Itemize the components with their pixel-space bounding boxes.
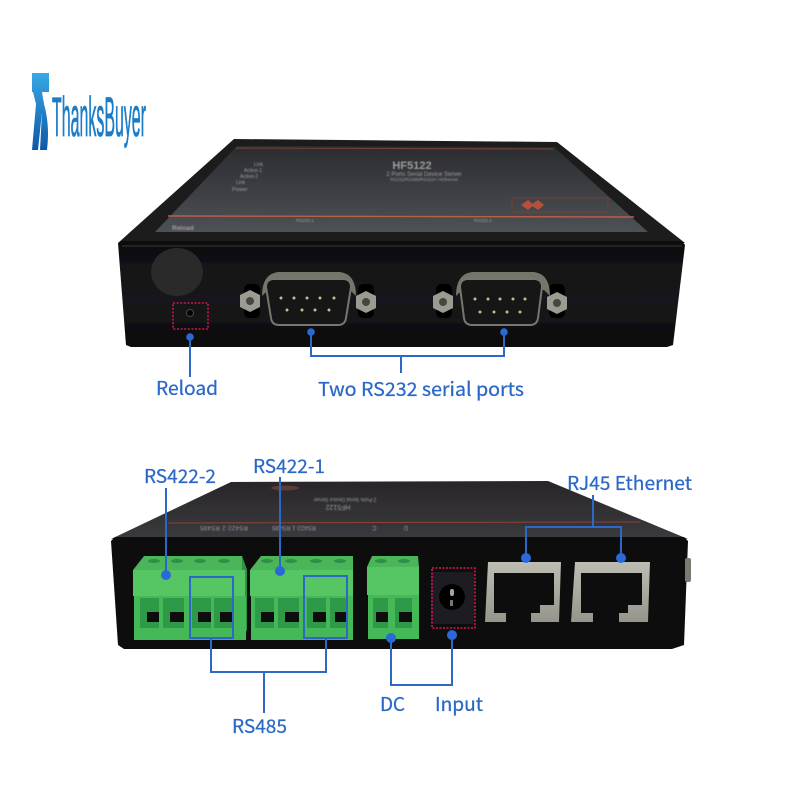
callout: RS485: RS485: [232, 712, 287, 739]
text: ThanksBuyer: [52, 85, 146, 148]
plate printed text: RS422-1 RS485: [271, 524, 316, 530]
plate printed text: Power: [232, 187, 248, 193]
dotted power jack frame: [432, 568, 475, 628]
RJ45 port 1: [485, 562, 561, 622]
dotted reload frame: [173, 303, 208, 329]
plate reflection: [271, 486, 299, 490]
front rim highlight: [122, 245, 682, 247]
plate printed text: HF5122: [325, 503, 350, 510]
callout: Two RS232 serial ports: [307, 328, 524, 402]
plate orange lines: [168, 148, 634, 217]
DB9 connector 1: [240, 272, 376, 325]
callout: DC Input: Input: [435, 690, 483, 717]
callout: RJ45 Ethernet: [521, 469, 692, 563]
device top face: [118, 139, 685, 243]
plate orange line: [168, 522, 640, 523]
plate printed text: [199, 496, 408, 530]
reload hole: [186, 310, 194, 316]
device front face: [111, 537, 688, 649]
callout: Two RS232 serial ports: Two RS232 serial ports: [318, 375, 524, 402]
plate printed text: HF5122: [392, 160, 432, 172]
plate printed text: RS232/RS485/RS422<->Ethernet: [390, 177, 459, 182]
label plate: [155, 146, 648, 232]
RJ45 port 2: [571, 562, 650, 622]
reload cap: [151, 248, 203, 296]
icon: logo mark: [32, 73, 49, 150]
power jack: [431, 572, 474, 624]
plate printed text: 2 Ports Serial Device Server: [313, 496, 376, 502]
callout: DC Input: DC: [380, 690, 405, 717]
plate printed text: DC: [371, 524, 408, 530]
device top face: [111, 481, 688, 539]
side screw: [685, 558, 691, 582]
callout: RS422-1: RS422-1: [253, 452, 325, 479]
plate printed text: 2 Ports Serial Device Server: [386, 172, 462, 178]
callout: RS485: [190, 576, 347, 739]
terminal block DC: [367, 556, 419, 639]
callout: RS422-2: [144, 462, 216, 580]
callout: DC Input: [380, 630, 483, 717]
plate printed text: RS422-2 RS485: [199, 524, 248, 530]
callout: RS422-2: RS422-2: [144, 462, 216, 489]
plate printed text: RS232-1: [296, 218, 314, 223]
plate printed text: Link: [254, 162, 264, 168]
device photo: top view, serial side: [118, 139, 685, 347]
plate printed text: [172, 160, 492, 232]
plate printed text: Link: [236, 180, 246, 186]
DB9 connector 2: [433, 272, 567, 325]
callout: RJ45 Ethernet: RJ45 Ethernet: [567, 469, 692, 496]
callout: Reload: [156, 333, 218, 401]
logo: ThanksBuyer: [32, 73, 146, 150]
callout: Reload: Reload: [156, 374, 218, 401]
callout: RS422-1: [253, 452, 325, 576]
terminal block RS422-1: [250, 556, 353, 640]
device front face: [118, 241, 685, 347]
plate printed text: RS232-2: [474, 218, 492, 223]
terminal block RS422-2: [133, 556, 247, 640]
device photo: terminal side: [111, 481, 691, 649]
plate logo badge: [512, 198, 608, 212]
plate printed text: Active-1: [244, 168, 262, 174]
plate printed text: Reload: [172, 225, 194, 232]
plate printed text: Active-2: [240, 174, 258, 180]
